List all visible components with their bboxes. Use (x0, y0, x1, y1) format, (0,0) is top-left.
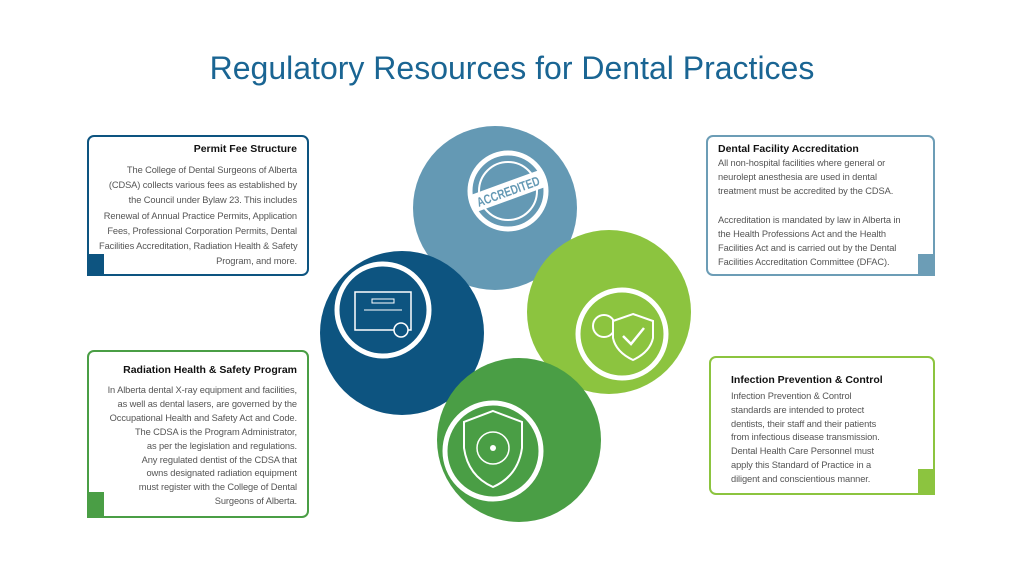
panel: infection prevention: dentists, their staff and their patients (731, 419, 876, 429)
panel: dental facility accreditation: All non-hospital facilities where general or (718, 158, 885, 168)
panel: permit fee structure: The College of Dental Surgeons of Alberta (127, 165, 297, 175)
circle: infection shield (527, 230, 691, 394)
panel: radiation health & safety: as well as dental lasers, are governed by the (118, 399, 297, 409)
panel: dental facility accreditation: the Health Professions Act and the Health (718, 229, 886, 239)
panel: dental facility accreditation: Facilities Act and is carried out by the Dental (718, 243, 896, 253)
panel: radiation health & safety: must register with the College of Dental (139, 482, 297, 492)
panel: radiation health & safety: Surgeons of Alberta. (215, 496, 297, 506)
panel: infection prevention: Dental Health Care Personnel must (731, 446, 874, 456)
panel: radiation health & safety: owns designated radiation equipment (146, 468, 297, 478)
panel: permit fee structure: (CDSA) collects various fees as established by (109, 180, 297, 190)
panel: radiation health & safety: Any regulated dentist of the CDSA that (142, 455, 297, 465)
panel: permit fee structure: Fees, Professional Corporation Permits, Dental (107, 226, 297, 236)
panel: radiation health & safety: Occupational Health and Safety Act and Code. (110, 413, 297, 423)
panel: dental facility accreditation: Accreditation is mandated by law in Alberta in (718, 215, 900, 225)
panel: infection prevention: from infectious disease transmission. (731, 432, 880, 442)
panel: permit fee structure: the Council under Bylaw 23. This includes (129, 195, 297, 205)
circle: accredited (413, 126, 577, 290)
panel: infection prevention: standards are intended to protect (731, 405, 864, 415)
panel: dental facility accreditation: Facilities Accreditation Committee (DFAC). (718, 257, 889, 267)
panel: dental facility accreditation: neurolept anesthesia are used in dental (718, 172, 877, 182)
panel: permit fee structure: Program, and more. (216, 256, 297, 266)
panel: infection prevention (709, 356, 935, 495)
panel: infection prevention: apply this Standard of Practice in a (731, 460, 871, 470)
panel: dental facility accreditation: treatment must be accredited by the CDSA. (718, 186, 893, 196)
circle: accredited: ACCREDITED (475, 173, 542, 210)
panel: radiation health & safety: In Alberta dental X-ray equipment and facilities, (108, 385, 297, 395)
panel: infection prevention: diligent and conscientious manner. (731, 474, 870, 484)
panel: dental facility accreditation (706, 135, 935, 276)
panel: radiation health & safety (87, 350, 309, 518)
panel: permit fee structure: Facilities Accreditation, Radiation Health & Safety (99, 241, 298, 251)
title: Regulatory Resources for Dental Practices (210, 50, 814, 86)
panel: permit fee structure: Permit Fee Structure (194, 143, 297, 155)
circle: radiation shield (437, 358, 601, 522)
panel: infection prevention: Infection Prevention & Control (731, 374, 883, 386)
panel: dental facility accreditation: Dental Facility Accreditation (718, 143, 859, 155)
panel: radiation health & safety: as per the legislation and regulations. (147, 441, 297, 451)
panel: permit fee structure (87, 135, 309, 276)
panel: radiation health & safety: Radiation Health & Safety Program (123, 364, 297, 376)
panel: radiation health & safety: The CDSA is the Program Administrator, (135, 427, 297, 437)
panel: infection prevention: Infection Prevention & Control (731, 391, 852, 401)
panel: permit fee structure: Renewal of Annual Practice Permits, Application (104, 211, 297, 221)
circle: certificate (320, 251, 484, 415)
